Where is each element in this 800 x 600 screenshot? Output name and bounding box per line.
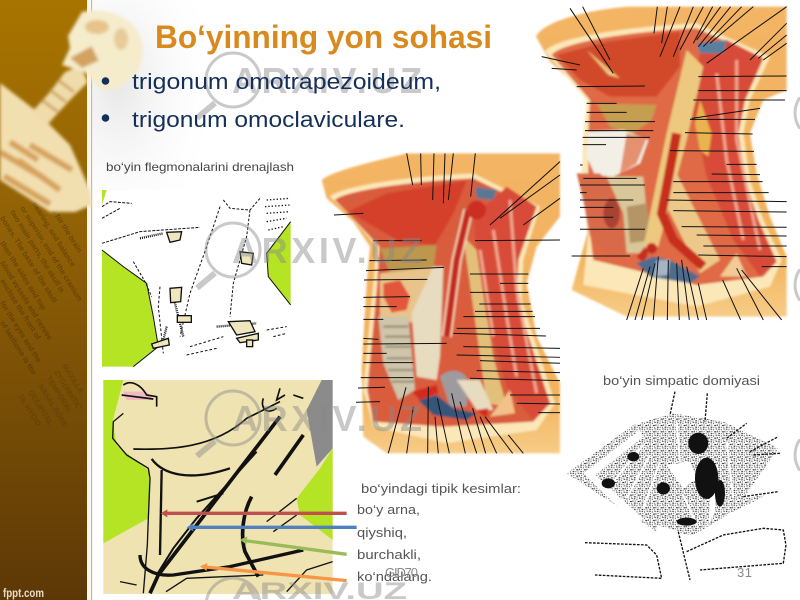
caption: incisions list: qiyshiq, <box>357 526 407 540</box>
background book text on panel: TEMPORAL <box>44 374 74 415</box>
page number: 31 <box>737 565 752 580</box>
skeleton illustration <box>0 11 143 212</box>
watermark: ARXIV.UZ: ARXIV.UZ <box>232 60 422 101</box>
caption: incisions list <box>357 482 521 584</box>
leader lines <box>334 153 560 453</box>
watermark: ARXIV.UZ <box>197 53 800 600</box>
caption: incisions list: bo‘yindagi tipik kesimlar: <box>361 482 521 496</box>
background book text on panel: bones. The base of the skull <box>0 214 59 304</box>
left brown side panel <box>0 0 222 600</box>
watermark: ARXIV.UZ: ARXIV.UZ <box>232 398 422 439</box>
background book text on panel: NASAL BONE <box>36 382 70 429</box>
background book text on panel: MAXILLA <box>60 362 86 396</box>
caption: incisions list: bo‘y arna, <box>357 503 420 517</box>
bullet list: trigonum omoclaviculare. <box>132 107 405 132</box>
figure: neck dissection middle <box>322 153 560 453</box>
background book text on panel: two main parts, the skull is <box>8 208 67 294</box>
background book text on panel: hearing, and balance <box>30 200 77 268</box>
bullet list: trigonum omotrapezoideum, <box>132 69 441 94</box>
background book text on panel: or superior, end of the cranium <box>18 204 85 303</box>
footer: fppt.com: fppt.com <box>3 588 44 600</box>
footer: GID70: GID70 <box>385 565 418 580</box>
background book text on panel: 15. HYOID <box>16 392 43 428</box>
background book text on panel: case for the brain <box>43 196 84 254</box>
title: Bo‘yinning yon sohasi <box>155 19 492 55</box>
background book text on panel: OCCIPITAL <box>26 388 55 427</box>
leader lines <box>542 7 787 320</box>
caption: drainage: bo‘yin flegmonalarini drenajlash <box>106 160 294 174</box>
background book text on panel <box>0 196 86 429</box>
figure: neck dissection right <box>536 7 787 320</box>
bullet list <box>102 69 441 132</box>
watermark: ARXIV.UZ: ARXIV.UZ <box>232 230 422 271</box>
arrows <box>161 509 357 581</box>
caption: incisions list: ko‘ndalang. <box>357 570 432 584</box>
background book text on panel: ZYGOMATIC <box>52 368 84 411</box>
caption: sympathetic trunk: bo‘yin simpatic domiyasi <box>603 374 760 388</box>
figure: sympathetic trunk sketch <box>567 392 786 580</box>
caption: incisions list: burchakli, <box>357 548 421 562</box>
figure: neck incisions diagram <box>103 380 357 594</box>
figure: neck phlegmon drainage sketch <box>102 190 291 367</box>
